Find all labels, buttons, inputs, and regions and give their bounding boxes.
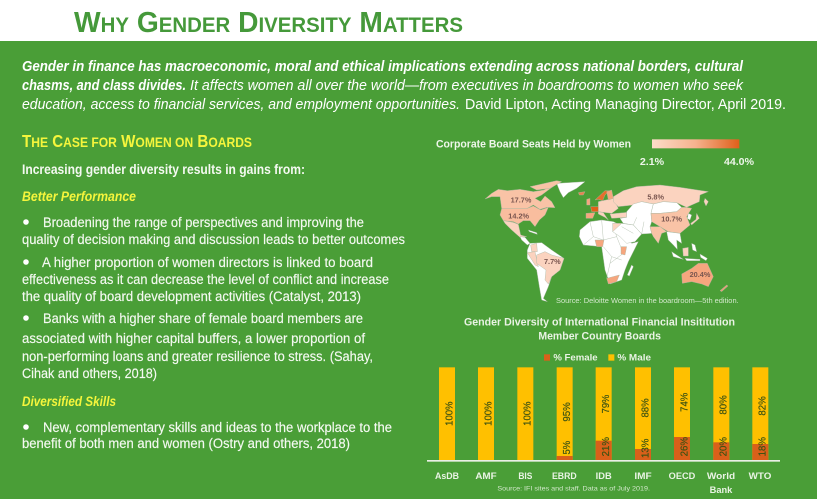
bar value labels: 18% (758, 437, 769, 456)
chart legend: % Female (553, 353, 598, 363)
bar value labels: 13% (640, 439, 651, 458)
bar value labels: 82% (758, 396, 769, 416)
intro quote: David Lipton, Acting Managing Director, April 2019. (465, 97, 786, 113)
axis line (427, 460, 780, 462)
bullet: women directors (22, 255, 389, 304)
section: diversified skills (22, 394, 392, 451)
chart legend: % Male (617, 353, 651, 363)
bar value labels: 80% (719, 395, 730, 415)
panel: corporate board seats map (436, 139, 754, 305)
category labels: EBRD (552, 471, 577, 481)
map legend: 44.0% (724, 157, 754, 168)
chart legend (544, 353, 651, 363)
bullet: banks: associated with higher capital buffers, a lower proportion of (22, 331, 365, 346)
category labels: IDB (596, 471, 612, 481)
category labels: OECD (669, 471, 696, 481)
category labels: AMF (475, 471, 497, 481)
bar value labels: 95% (562, 402, 573, 422)
map value labels: 10.7% (661, 214, 683, 223)
map title: Corporate Board Seats Held by Women (436, 139, 631, 151)
bullet: broadening perspectives (22, 215, 405, 247)
heading: the case for women on boards: THE CASE FOR WOMEN ON BOARDS (22, 131, 252, 151)
section: better performance (22, 189, 405, 381)
category labels: BIS (518, 471, 532, 481)
category labels: Bank (710, 485, 733, 495)
category labels: WTO (749, 471, 771, 481)
bar value labels (444, 393, 769, 458)
bar value labels: 79% (601, 395, 612, 413)
bar value labels: 88% (640, 398, 651, 417)
heading: diversified skills: Diversified Skills (22, 394, 116, 409)
world map (485, 181, 728, 302)
bullet: broadening perspectives: Broadening the range of perspectives and improving the (43, 215, 364, 230)
bar value labels: 26% (679, 437, 690, 456)
bar value labels: 20% (719, 437, 730, 456)
map source: Source: Deloitte Women in the boardroom—5th edition. (556, 298, 739, 305)
category labels: IMF (634, 471, 652, 481)
chart title: Member Country Boards (538, 331, 661, 343)
intro quote: It affects women all over the world—from executives in boardrooms to women who seek (190, 78, 744, 94)
bullet: women directors: A higher proportion of women directors is linked to board (42, 255, 373, 270)
chart title (464, 317, 735, 343)
chart source: Source: IFI sites and staff. Data as of July 2019. (497, 486, 650, 493)
category labels (435, 471, 771, 495)
map value labels: 5.8% (647, 193, 664, 202)
intro quote (22, 59, 786, 113)
bullet: banks: non-performing loans and greater resilience to stress. (Sahay, (22, 349, 373, 364)
intro quote: education, access to financial services, and employment opportunities. (22, 97, 460, 113)
bullet: banks: Banks with a higher share of female board members are (43, 311, 363, 326)
bar value labels: 100% (444, 401, 455, 426)
bar value labels: 100% (523, 401, 534, 426)
bullet: banks (22, 311, 373, 381)
map legend: 2.1% (640, 157, 664, 168)
bullet: broadening perspectives: quality of decision making and discussion leads to better outcomes (22, 232, 405, 247)
map value labels (508, 193, 711, 279)
bars (439, 367, 768, 460)
panel: gender diversity bar chart (427, 317, 780, 495)
bullet: women directors: effectiveness as it can decrease the level of conflict and increase (22, 272, 389, 287)
category labels: AsDB (435, 471, 459, 481)
bar value labels: 21% (601, 437, 612, 456)
bullet: banks: Cihak and others, 2018) (22, 366, 157, 381)
category labels: World (707, 471, 735, 481)
bullet: complementary skills: New, complementary skills and ideas to the workplace to the (43, 420, 392, 435)
heading: better performance: Better Performance (22, 189, 136, 204)
map value labels: 17.7% (511, 195, 532, 204)
bar value labels: 74% (679, 393, 690, 412)
chart title: Gender Diversity of International Financial Insititution (464, 317, 735, 329)
bullet: complementary skills (22, 420, 392, 451)
map value labels: 20.4% (690, 270, 711, 279)
map value labels: 14.2% (508, 212, 530, 221)
intro quote: chasms, and class divides. (22, 78, 186, 94)
bullet: complementary skills: benefit of both men and women (Ostry and others, 2018) (22, 436, 350, 451)
title: WHY GENDER DIVERSITY MATTERS (74, 7, 463, 39)
intro quote: Gender in finance has macroeconomic, moral and ethical implications extending across national borders, cultural (22, 59, 744, 75)
bullet: women directors: the quality of board development activities (Catalyst, 2013) (22, 289, 361, 304)
bar value labels: 100% (483, 401, 494, 426)
bar value labels: 5% (562, 441, 573, 454)
map legend (640, 139, 754, 168)
subheading: Increasing gender diversity results in gains from: (22, 161, 305, 177)
map value labels: 7.7% (544, 257, 561, 266)
